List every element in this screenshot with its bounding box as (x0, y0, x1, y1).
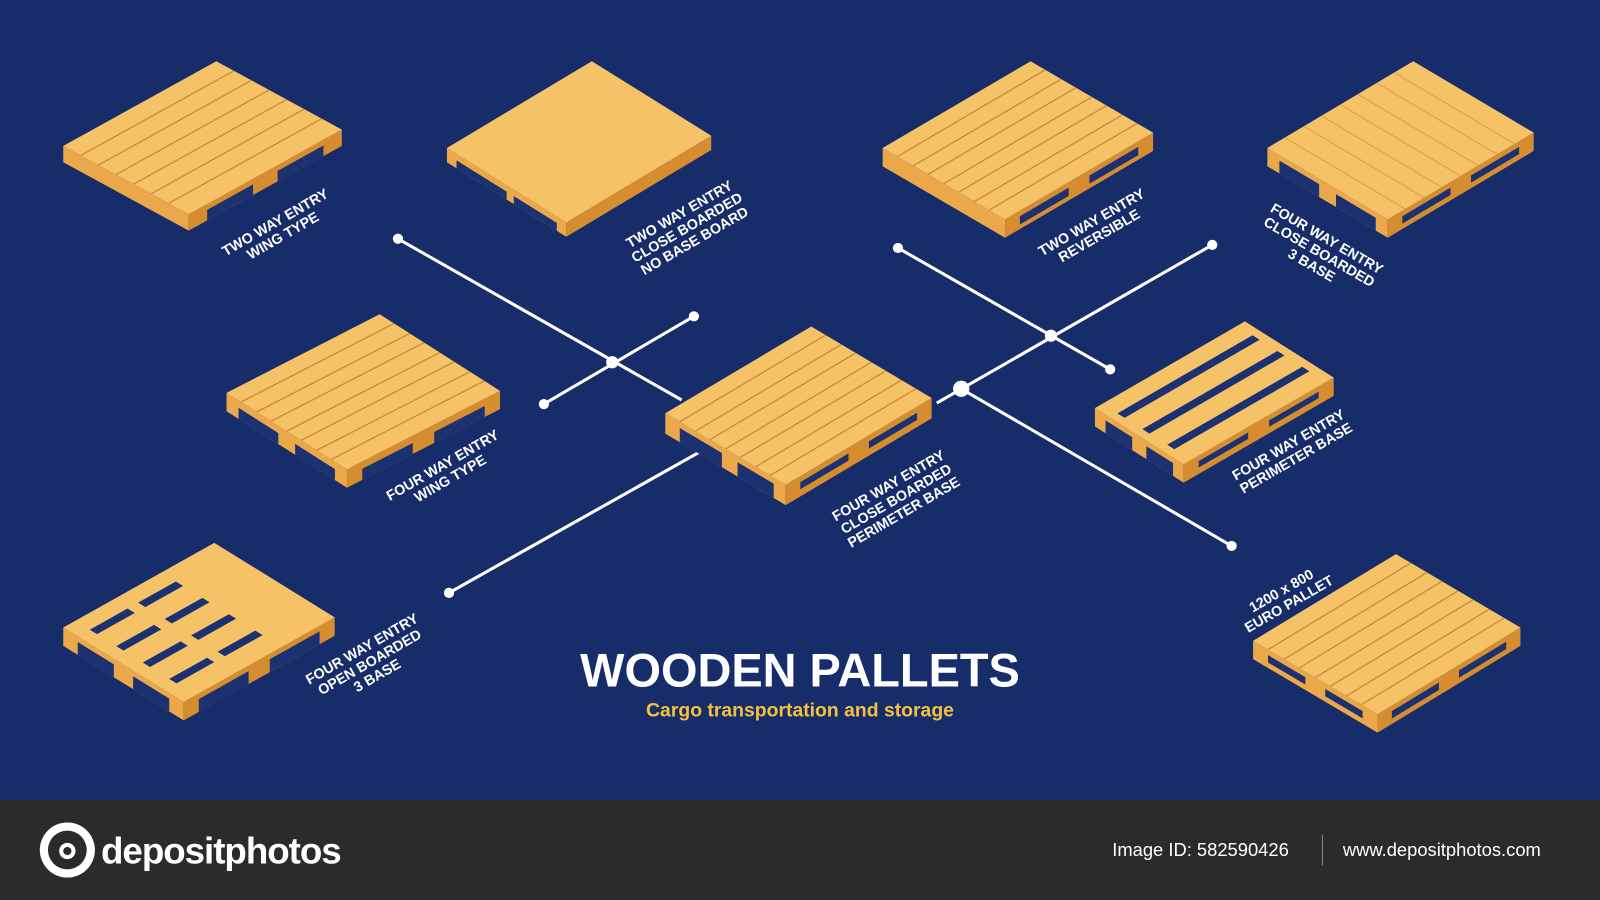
label 9: EURO PALLET (1242, 573, 1337, 637)
pallet 9: euro pallet (1253, 554, 1520, 733)
label 2: NO BASE BOARD (638, 204, 751, 279)
label 2: CLOSE BOARDED (629, 190, 746, 266)
pallet 4: four way close boarded 3 base (1267, 61, 1534, 238)
label 8: 3 BASE (351, 656, 404, 696)
icon: logo camera (40, 822, 95, 878)
label 4: 3 BASE (1285, 246, 1338, 286)
pallet 7: four way entry perimeter base (1095, 321, 1334, 483)
pallet 5: four way entry wing type (227, 314, 500, 488)
title: WOODEN PALLETS (580, 645, 1020, 697)
footer bar (0, 800, 1600, 900)
label 9: 1200 x 800 (1247, 567, 1317, 616)
label 3: TWO WAY ENTRY (1036, 186, 1148, 260)
label 4: CLOSE BOARDED (1261, 214, 1377, 291)
label 7: FOUR WAY ENTRY (1230, 407, 1348, 484)
label 2: TWO WAY ENTRY (624, 178, 736, 252)
logo text: depositphotos (101, 830, 341, 871)
label 6: CLOSE BOARDED (838, 461, 955, 538)
label 4: FOUR WAY ENTRY (1267, 201, 1386, 278)
url: www.depositphotos.com (1342, 839, 1541, 860)
pallet 3: two way entry reversible (883, 61, 1153, 238)
subtitle: Cargo transportation and storage (646, 699, 954, 721)
label 1: TWO WAY ENTRY (220, 186, 332, 260)
label 5: WING TYPE (412, 452, 489, 506)
label 8: FOUR WAY ENTRY (303, 611, 422, 688)
label 3: REVERSIBLE (1056, 207, 1143, 266)
connector lines (393, 234, 1237, 598)
label 6: FOUR WAY ENTRY (830, 447, 948, 525)
image id: Image ID: 582590426 (1112, 839, 1289, 860)
label 8: OPEN BOARDED (315, 627, 424, 699)
label 7: PERIMETER BASE (1238, 420, 1355, 497)
pallet 6: center four way close boarded perimeter base (665, 327, 932, 505)
pallet 8: four way entry open boarded 3 base (63, 543, 335, 720)
pallet 1: two way entry wing type (63, 61, 342, 231)
label 5: FOUR WAY ENTRY (384, 427, 502, 505)
label 1: WING TYPE (245, 209, 322, 263)
pallet 2: two way entry close boarded no base board (447, 61, 711, 237)
label 6: PERIMETER BASE (845, 474, 963, 551)
